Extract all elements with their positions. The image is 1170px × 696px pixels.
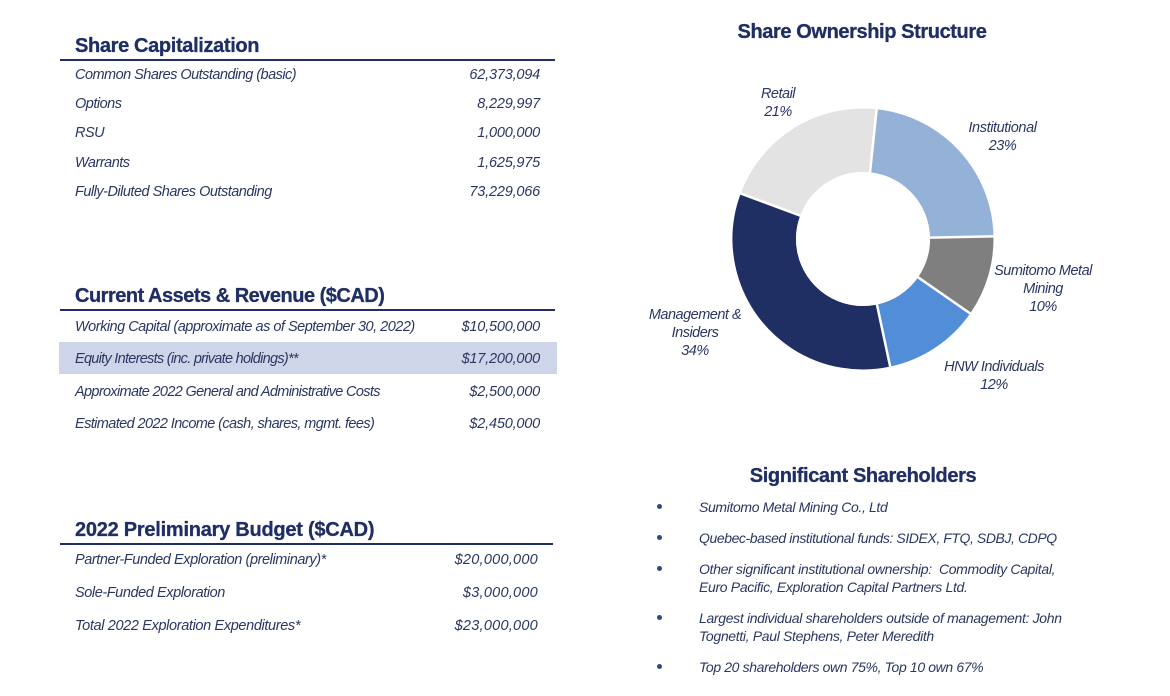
segment: institutional 23% — [754, 130, 972, 348]
heading: current assets and revenue: Current Assets & Revenue ($CAD) — [75, 285, 384, 307]
panel: preliminary budget — [60, 519, 553, 634]
row: warrants: Warrants — [75, 155, 130, 171]
label: retail: Retail — [761, 86, 795, 102]
row: options — [75, 96, 541, 112]
row: fully-diluted shares: 73,229,066 — [469, 184, 540, 200]
label: institutional: 23% — [989, 138, 1016, 154]
bullet marker 1 — [656, 504, 662, 508]
segment: Sumitomo Metal Mining 10% — [762, 138, 964, 340]
row: RSU: 1,000,000 — [477, 125, 540, 141]
row: common shares: 62,373,094 — [469, 67, 540, 83]
row: total exploration expenditures — [75, 618, 538, 634]
bullet marker 2 — [656, 534, 662, 540]
bullet text 3: Other significant institutional ownership: Commodity Capital, — [699, 561, 1055, 577]
row: options: 8,229,997 — [477, 96, 540, 112]
segment: management and insiders 34% — [746, 122, 980, 356]
row: partner-funded exploration: $20,000,000 — [455, 552, 538, 568]
row: equity interests: Equity Interests (inc. private holdings)** — [75, 351, 298, 367]
heading: significant shareholders: Significant Shareholders — [750, 465, 976, 487]
row: options: Options — [75, 96, 121, 112]
label: Sumitomo Metal Mining: Sumitomo Metal — [994, 263, 1092, 279]
bullet text 1: Sumitomo Metal Mining Co., Ltd — [699, 499, 887, 515]
bullet marker 4 — [656, 614, 662, 620]
label: Sumitomo Metal Mining: 10% — [1029, 299, 1057, 315]
heading: share ownership structure: Share Ownership Structure — [738, 21, 986, 43]
row: general and administrative costs: Approximate 2022 General and Administrative Costs — [75, 384, 380, 400]
label: institutional — [968, 120, 1038, 154]
row: general and administrative costs — [74, 384, 540, 400]
bullet text 4: Largest individual shareholders outside of management: John — [699, 610, 1062, 626]
row: fully-diluted shares — [75, 184, 540, 200]
row: partner-funded exploration: Partner-Funded Exploration (preliminary)* — [75, 552, 326, 568]
row: RSU: RSU — [75, 125, 104, 141]
row: warrants — [75, 155, 540, 171]
row: general and administrative costs: $2,500,000 — [469, 384, 540, 400]
label: management and insiders — [649, 307, 741, 359]
label: Sumitomo Metal Mining: Mining — [1023, 281, 1063, 297]
panel: significant shareholders — [657, 465, 1062, 675]
row: estimated income — [75, 416, 540, 432]
label: HNW individuals — [944, 359, 1044, 393]
row: total exploration expenditures: $23,000,000 — [455, 618, 538, 634]
label: management and insiders: Insiders — [672, 325, 718, 341]
row: equity interests — [75, 351, 540, 367]
bullet text 5: Top 20 shareholders own 75%, Top 10 own 67% — [699, 659, 983, 675]
label: management and insiders: 34% — [681, 343, 709, 359]
row: common shares — [75, 67, 540, 83]
bullet text 4 — [699, 610, 1062, 644]
label: institutional: Institutional — [968, 120, 1037, 136]
bullet marker 5 — [656, 664, 662, 668]
bullet text 2: Quebec-based institutional funds: SIDEX, FTQ, SDBJ, CDPQ — [699, 530, 1057, 546]
label: management and insiders: Management & — [649, 307, 741, 323]
label: HNW individuals: HNW Individuals — [944, 359, 1044, 375]
row: sole-funded exploration: $3,000,000 — [463, 585, 538, 601]
bullet marker 3 — [656, 566, 662, 570]
row: fully-diluted shares: Fully-Diluted Shares Outstanding — [75, 184, 272, 200]
highlight band: equity interests — [59, 342, 557, 374]
row: partner-funded exploration — [75, 552, 538, 568]
label: HNW individuals: 12% — [980, 377, 1008, 393]
panel: current assets and revenue — [59, 285, 557, 432]
label: retail: 21% — [764, 104, 792, 120]
row: equity interests: $17,200,000 — [462, 351, 540, 367]
row: estimated income: $2,450,000 — [469, 416, 540, 432]
donut chart: share ownership — [732, 108, 994, 370]
row: sole-funded exploration: Sole-Funded Exploration — [75, 585, 225, 601]
label: retail — [761, 86, 796, 120]
row: RSU — [75, 125, 540, 141]
segment: HNW individuals 12% — [726, 102, 1000, 376]
segment: retail 21% — [736, 112, 990, 366]
heading: share capitalization: Share Capitalization — [75, 35, 259, 57]
row: total exploration expenditures: Total 2022 Exploration Expenditures* — [75, 618, 300, 634]
panel: share capitalization — [60, 35, 555, 200]
row: working capital: $10,500,000 — [462, 319, 540, 335]
row: estimated income: Estimated 2022 Income (cash, shares, mgmt. fees) — [75, 416, 374, 432]
bullet text 3: Euro Pacific, Exploration Capital Partners Ltd. — [699, 579, 968, 595]
row: common shares: Common Shares Outstanding (basic) — [75, 67, 296, 83]
row: warrants: 1,625,975 — [477, 155, 540, 171]
row: working capital: Working Capital (approximate as of September 30, 2022) — [75, 319, 415, 335]
bullet text 4: Tognetti, Paul Stephens, Peter Meredith — [699, 628, 934, 644]
heading: preliminary budget: 2022 Preliminary Budget ($CAD) — [75, 519, 374, 541]
label: Sumitomo Metal Mining — [994, 263, 1093, 315]
row: sole-funded exploration — [75, 585, 538, 601]
bullet text 3 — [699, 561, 1055, 595]
